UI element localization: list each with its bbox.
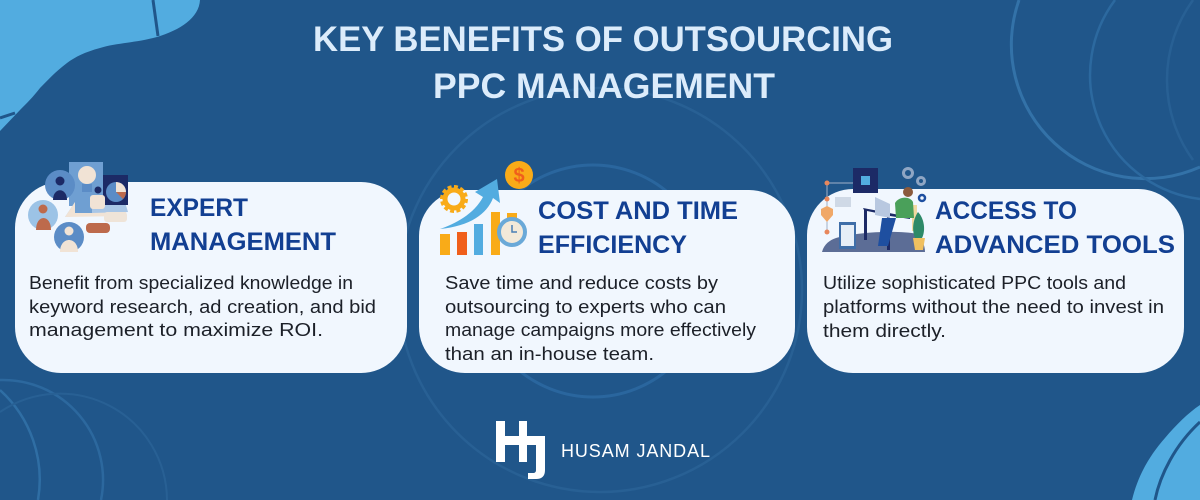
title: KEY BENEFITS OF OUTSOURCING	[313, 20, 893, 59]
panel: expert management	[15, 162, 407, 373]
heading: EFFICIENCY	[538, 231, 687, 259]
body text: than an in-house team.	[445, 344, 654, 364]
body text: manage campaigns more effectively	[445, 320, 756, 340]
body text: Save time and reduce costs by	[445, 273, 718, 293]
heading	[150, 194, 336, 256]
body text: Utilize sophisticated PPC tools and	[823, 273, 1126, 293]
body text: Benefit from specialized knowledge in	[29, 273, 353, 293]
heading: ADVANCED TOOLS	[935, 231, 1175, 259]
icon: team and idea	[28, 162, 128, 252]
icon: person at laptop with chip and gears	[821, 168, 925, 252]
icon: growth chart, coin, gear, stopwatch	[440, 161, 533, 255]
corner blob: top left	[0, 0, 200, 131]
panel: access to advanced tools	[807, 168, 1184, 373]
logo: Husam Jandal	[496, 421, 710, 479]
title	[313, 20, 893, 106]
body text: management to maximize ROI.	[29, 320, 323, 340]
body text: keyword research, ad creation, and bid	[29, 297, 376, 317]
body text: platforms without the need to invest in	[823, 297, 1164, 317]
logo mark	[496, 421, 545, 479]
heading: MANAGEMENT	[150, 228, 336, 256]
heading: COST AND TIME	[538, 197, 738, 225]
corner blob: bottom right	[1132, 405, 1200, 500]
panel: cost and time efficiency	[419, 161, 795, 373]
body text	[445, 273, 756, 364]
body text: outsourcing to experts who can	[445, 297, 726, 317]
heading	[935, 197, 1175, 259]
title: PPC MANAGEMENT	[433, 67, 775, 106]
icon: growth chart, coin, gear, stopwatch: $	[513, 165, 525, 187]
heading: ACCESS TO	[935, 197, 1077, 225]
body text: them directly.	[823, 321, 946, 341]
heading: EXPERT	[150, 194, 248, 222]
heading	[538, 197, 738, 259]
body text	[29, 273, 376, 340]
body text	[823, 273, 1164, 341]
logo wordmark: HUSAM JANDAL	[561, 441, 710, 461]
